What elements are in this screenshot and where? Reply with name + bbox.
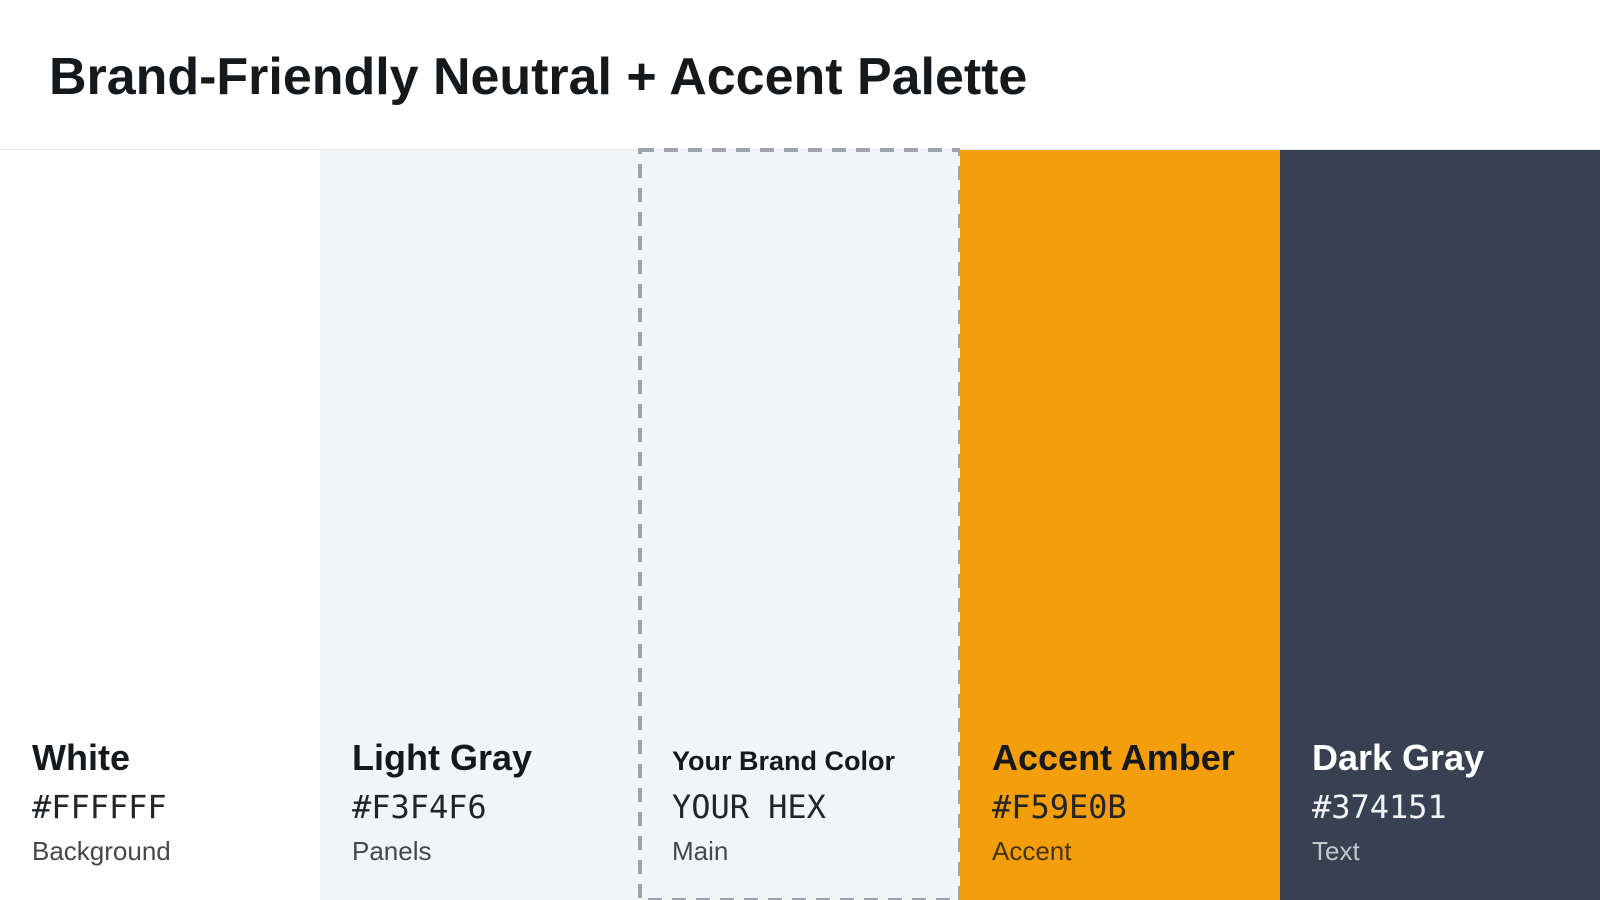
panel: Light Gray swatch: [320, 150, 640, 900]
panel: Your Brand Color placeholder swatch: [640, 150, 960, 900]
caption: Light Gray: Light Gray: [352, 737, 532, 778]
caption: White: Background: [32, 836, 171, 866]
dashed border around brand color swatch: [638, 148, 960, 900]
caption: White: [32, 737, 171, 866]
title: Brand-Friendly Neutral + Accent Palette: [49, 48, 1027, 106]
caption: Accent Amber: Accent Amber: [992, 737, 1235, 778]
caption: Accent Amber: #F59E0B: [992, 788, 1127, 826]
caption: Dark Gray: #374151: [1312, 788, 1447, 826]
caption: Light Gray: Panels: [352, 836, 432, 866]
caption: Your Brand Color: [672, 746, 895, 866]
caption: Your Brand Color: Main: [672, 836, 728, 866]
caption: Dark Gray: Dark Gray: [1312, 737, 1484, 778]
caption: White: #FFFFFF: [32, 788, 167, 826]
panel: White swatch: [0, 150, 320, 900]
panel: Accent Amber swatch: [960, 150, 1280, 900]
caption: Dark Gray: [1312, 737, 1484, 866]
panel: Dark Gray swatch: [1280, 150, 1600, 900]
caption: Light Gray: [352, 737, 532, 866]
caption: Accent Amber: [992, 737, 1235, 866]
caption: Your Brand Color: YOUR HEX: [672, 788, 826, 826]
caption: Light Gray: #F3F4F6: [352, 788, 487, 826]
caption: White: White: [32, 737, 130, 778]
caption: Your Brand Color: Your Brand Color: [672, 746, 895, 776]
caption: Accent Amber: Accent: [992, 836, 1072, 866]
header band: [0, 0, 1600, 150]
caption: Dark Gray: Text: [1312, 836, 1360, 866]
